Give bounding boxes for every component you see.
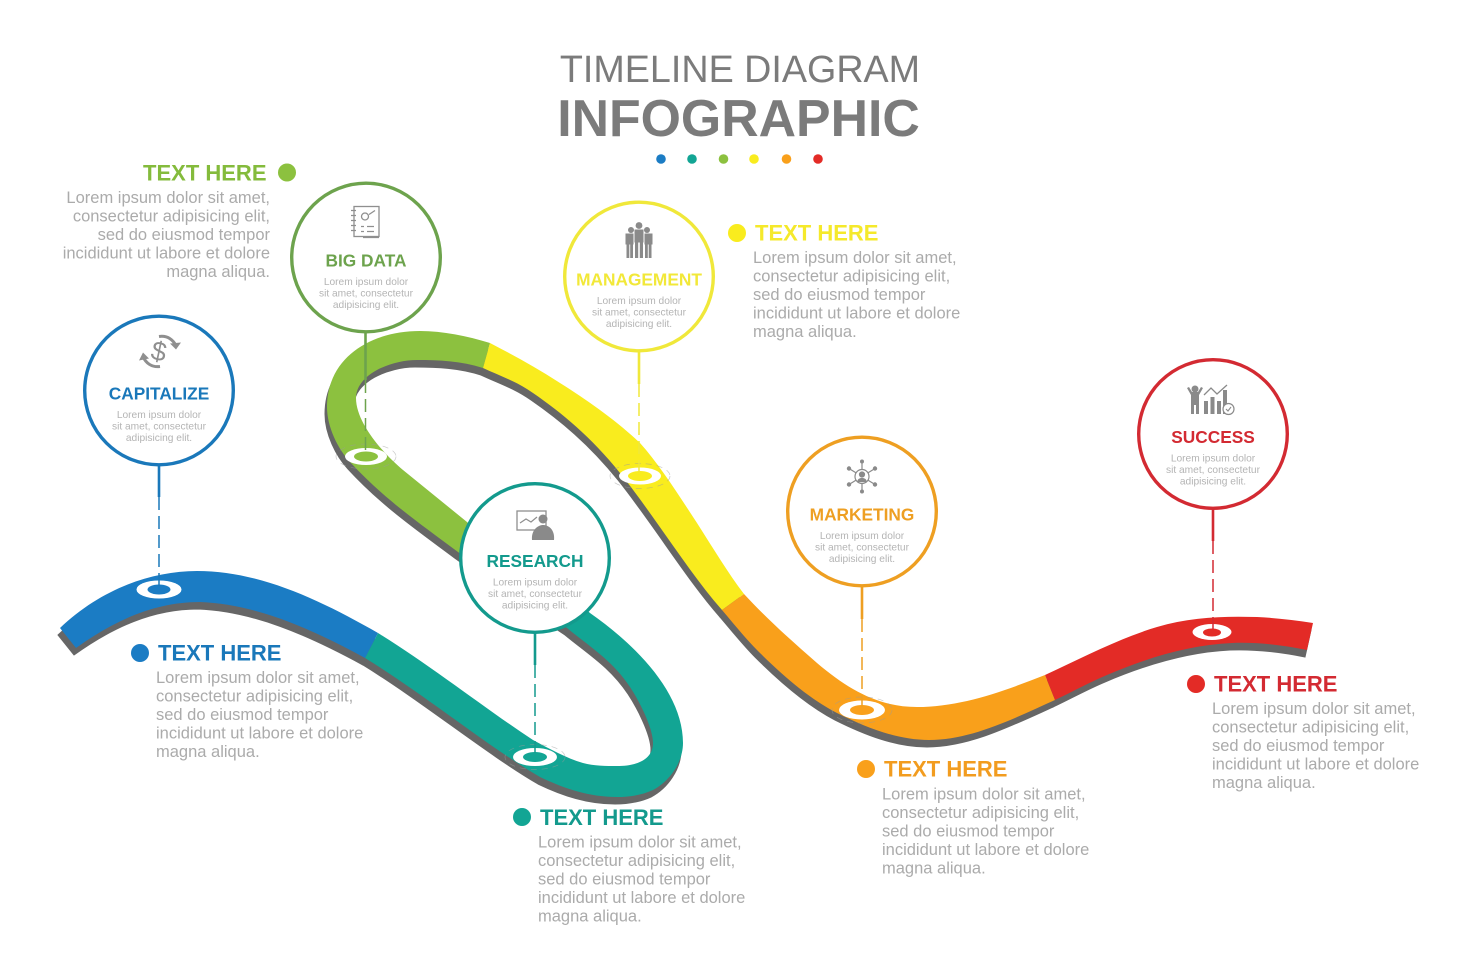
text block: yellow: sed do eiusmod tempor [753,286,926,304]
title: TIMELINE DIAGRAM [560,48,920,90]
panel: success circle: sit amet, consectetur [1166,465,1261,476]
text block: teal: magna aliqua. [538,908,642,926]
text block: yellow: TEXT HERE [755,220,878,246]
icon: notebook [351,206,379,238]
icon: person with growth chart [1187,385,1234,414]
text block: green: magna aliqua. [166,263,270,281]
text block: blue: consectetur adipisicing elit, [156,688,353,706]
text block: teal: consectetur adipisicing elit, [538,852,735,870]
road segment: teal [365,590,683,797]
colour dots row [656,154,823,164]
title: INFOGRAPHIC [557,89,920,147]
milestone marker: capitalize [136,465,182,598]
text block: green: TEXT HERE [143,160,266,186]
text block: red: consectetur adipisicing elit, [1212,718,1409,736]
panel: management circle: adipisicing elit. [606,319,672,330]
text block: blue: magna aliqua. [156,743,260,761]
panel: marketing circle: MARKETING [810,504,914,524]
text block: blue: TEXT HERE [158,640,281,666]
text block: teal: sed do eiusmod tempor [538,870,711,888]
text block: green: Lorem ipsum dolor sit amet, [66,189,270,207]
road segment: blue [60,571,378,658]
text block: yellow [728,220,960,341]
text block: teal: incididunt ut labore et dolore [538,889,745,907]
text block: red: sed do eiusmod tempor [1212,737,1385,755]
text block: teal: TEXT HERE [540,805,663,830]
text block: green: sed do eiusmod tempor [98,226,270,244]
panel: marketing circle: sit amet, consectetur [815,542,910,554]
icon: presenter and chart [517,511,554,540]
milestone marker: management [610,352,670,488]
panel: capitalize circle [85,316,233,465]
panel: management circle: sit amet, consectetur [592,308,687,318]
text block: red: incididunt ut labore et dolore [1212,756,1419,774]
text block: orange: consectetur adipisicing elit, [882,804,1079,822]
milestone marker: success [1192,509,1232,640]
panel: research circle [461,484,609,632]
panel: management circle: Lorem ipsum dolor [597,296,682,307]
text block: green: consectetur adipisicing elit, [73,208,270,226]
panel: research circle: sit amet, consectetur [488,589,583,600]
panel: big data circle: sit amet, consectetur [319,288,414,300]
title [557,48,920,147]
icon: dollar exchange [139,335,181,368]
icon: network person [847,460,877,493]
panel: big data circle: BIG DATA [326,250,407,270]
panel: research circle: RESEARCH [487,551,583,571]
text block: blue: Lorem ipsum dolor sit amet, [156,669,360,687]
text block: yellow: incididunt ut labore et dolore [753,304,960,322]
text block: green: incididunt ut labore et dolore [63,244,270,262]
panel: success circle: Lorem ipsum dolor [1171,454,1256,464]
road segment: orange [722,594,1055,740]
text block: yellow: magna aliqua. [753,323,857,341]
text block: orange [857,756,1089,878]
panel: big data circle [292,183,440,332]
text block: blue [131,640,363,761]
panel: capitalize circle: CAPITALIZE [109,384,209,404]
panel: research circle: adipisicing elit. [502,600,568,612]
icon: dollar exchange: $ [148,335,169,368]
panel: success circle: adipisicing elit. [1180,476,1246,488]
panel: big data circle: adipisicing elit. [333,300,399,311]
panel: capitalize circle: adipisicing elit. [126,433,192,444]
panel: marketing circle: adipisicing elit. [829,554,895,565]
text block: teal [513,805,745,926]
text block: blue: sed do eiusmod tempor [156,706,329,724]
road segment: red [1045,617,1313,700]
road shadow [58,338,1311,804]
text block: yellow: consectetur adipisicing elit, [753,268,950,286]
text block: orange: incididunt ut labore et dolore [882,841,1089,859]
panel: success circle: SUCCESS [1171,427,1255,447]
text block: green [63,160,296,281]
text block: orange: TEXT HERE [884,756,1007,782]
text block: red: TEXT HERE [1214,672,1337,696]
text block: teal: Lorem ipsum dolor sit amet, [538,834,742,852]
panel: capitalize circle: sit amet, consectetur [112,422,207,432]
text block: orange: magna aliqua. [882,860,986,878]
milestone marker: research [505,633,565,770]
road segment: green [327,331,500,582]
panel: success circle [1139,360,1287,508]
panel: marketing circle: Lorem ipsum dolor [820,531,905,542]
panel: marketing circle [788,437,936,586]
panel: management circle [565,202,713,351]
panel: research circle: Lorem ipsum dolor [493,578,578,588]
milestone marker: marketing [832,587,892,723]
text block: red: magna aliqua. [1212,774,1316,792]
panel: big data circle: Lorem ipsum dolor [324,277,409,288]
panel: management circle: MANAGEMENT [576,270,702,290]
icon: team [626,222,652,258]
milestone marker: big data [336,333,396,469]
text block: orange: sed do eiusmod tempor [882,822,1055,840]
text block: red: Lorem ipsum dolor sit amet, [1212,700,1416,718]
text block: yellow: Lorem ipsum dolor sit amet, [753,249,957,267]
text block: orange: Lorem ipsum dolor sit amet, [882,786,1086,804]
panel: capitalize circle: Lorem ipsum dolor [117,410,202,421]
text block: red [1187,672,1419,792]
text block: blue: incididunt ut labore et dolore [156,724,363,742]
road segment: yellow [483,343,744,610]
winding road timeline [58,331,1313,804]
